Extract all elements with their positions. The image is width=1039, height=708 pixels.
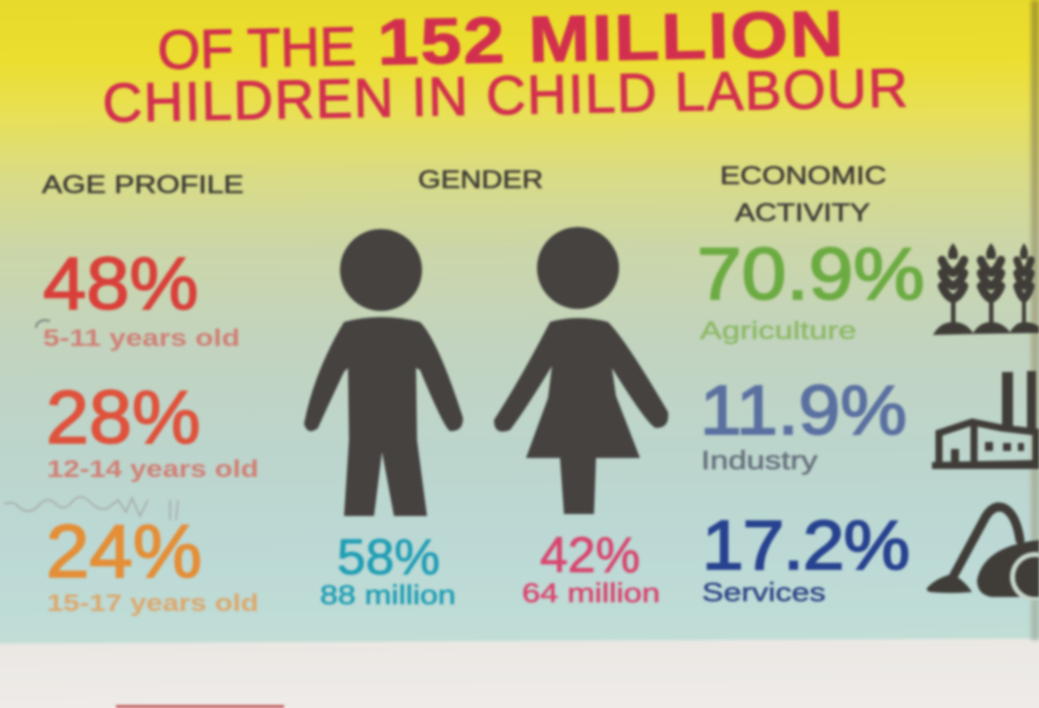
heading: economic activity: ACTIVITY	[735, 199, 870, 227]
stat: 48 percent	[42, 242, 240, 352]
stat: services: 17.2%	[702, 506, 909, 584]
stat: girls 42 percent: 64 million	[522, 578, 660, 608]
stat: industry: 11.9%	[700, 371, 907, 449]
heading: economic activity: ECONOMIC	[720, 162, 886, 190]
pen mark	[34, 318, 51, 329]
icon: wheat plants	[932, 242, 1039, 337]
stat: 48 percent: 5-11 years old	[43, 325, 240, 352]
stat: 24 percent: 24%	[46, 509, 202, 593]
icon: factory	[930, 369, 1039, 471]
handwritten scribble	[4, 496, 180, 520]
stat: boys 58 percent: 88 million	[320, 580, 456, 610]
stat: 24 percent	[46, 509, 259, 618]
title: OF THE	[157, 15, 356, 81]
bottom red rule	[116, 705, 284, 708]
stat: 48 percent: 48%	[43, 242, 199, 325]
icon: vacuum cleaner	[925, 500, 1039, 600]
stat: girls 42 percent	[522, 527, 660, 608]
title: CHILDREN IN CHILD LABOUR	[102, 56, 910, 134]
stat: agriculture: 70.9%	[697, 234, 925, 315]
stat: 28 percent: 12-14 years old	[47, 456, 259, 483]
stat: girls 42 percent: 42%	[540, 527, 640, 583]
heading: age profile: AGE PROFILE	[42, 171, 244, 199]
stat: agriculture: Agriculture	[700, 317, 857, 345]
icon: girl	[492, 225, 670, 516]
stat: boys 58 percent	[319, 529, 456, 610]
heading: economic activity	[720, 162, 887, 227]
title	[102, 0, 910, 134]
stat: 24 percent: 15-17 years old	[47, 590, 259, 617]
stat: 28 percent: 28%	[46, 375, 201, 459]
stat: services: Services	[702, 577, 826, 607]
heading: gender: GENDER	[418, 166, 543, 194]
stat: boys 58 percent: 58%	[337, 529, 440, 585]
stat: 28 percent	[46, 375, 259, 484]
page edge shadow	[1031, 0, 1039, 640]
stat: industry: Industry	[701, 445, 818, 475]
icon: boy	[302, 227, 465, 518]
